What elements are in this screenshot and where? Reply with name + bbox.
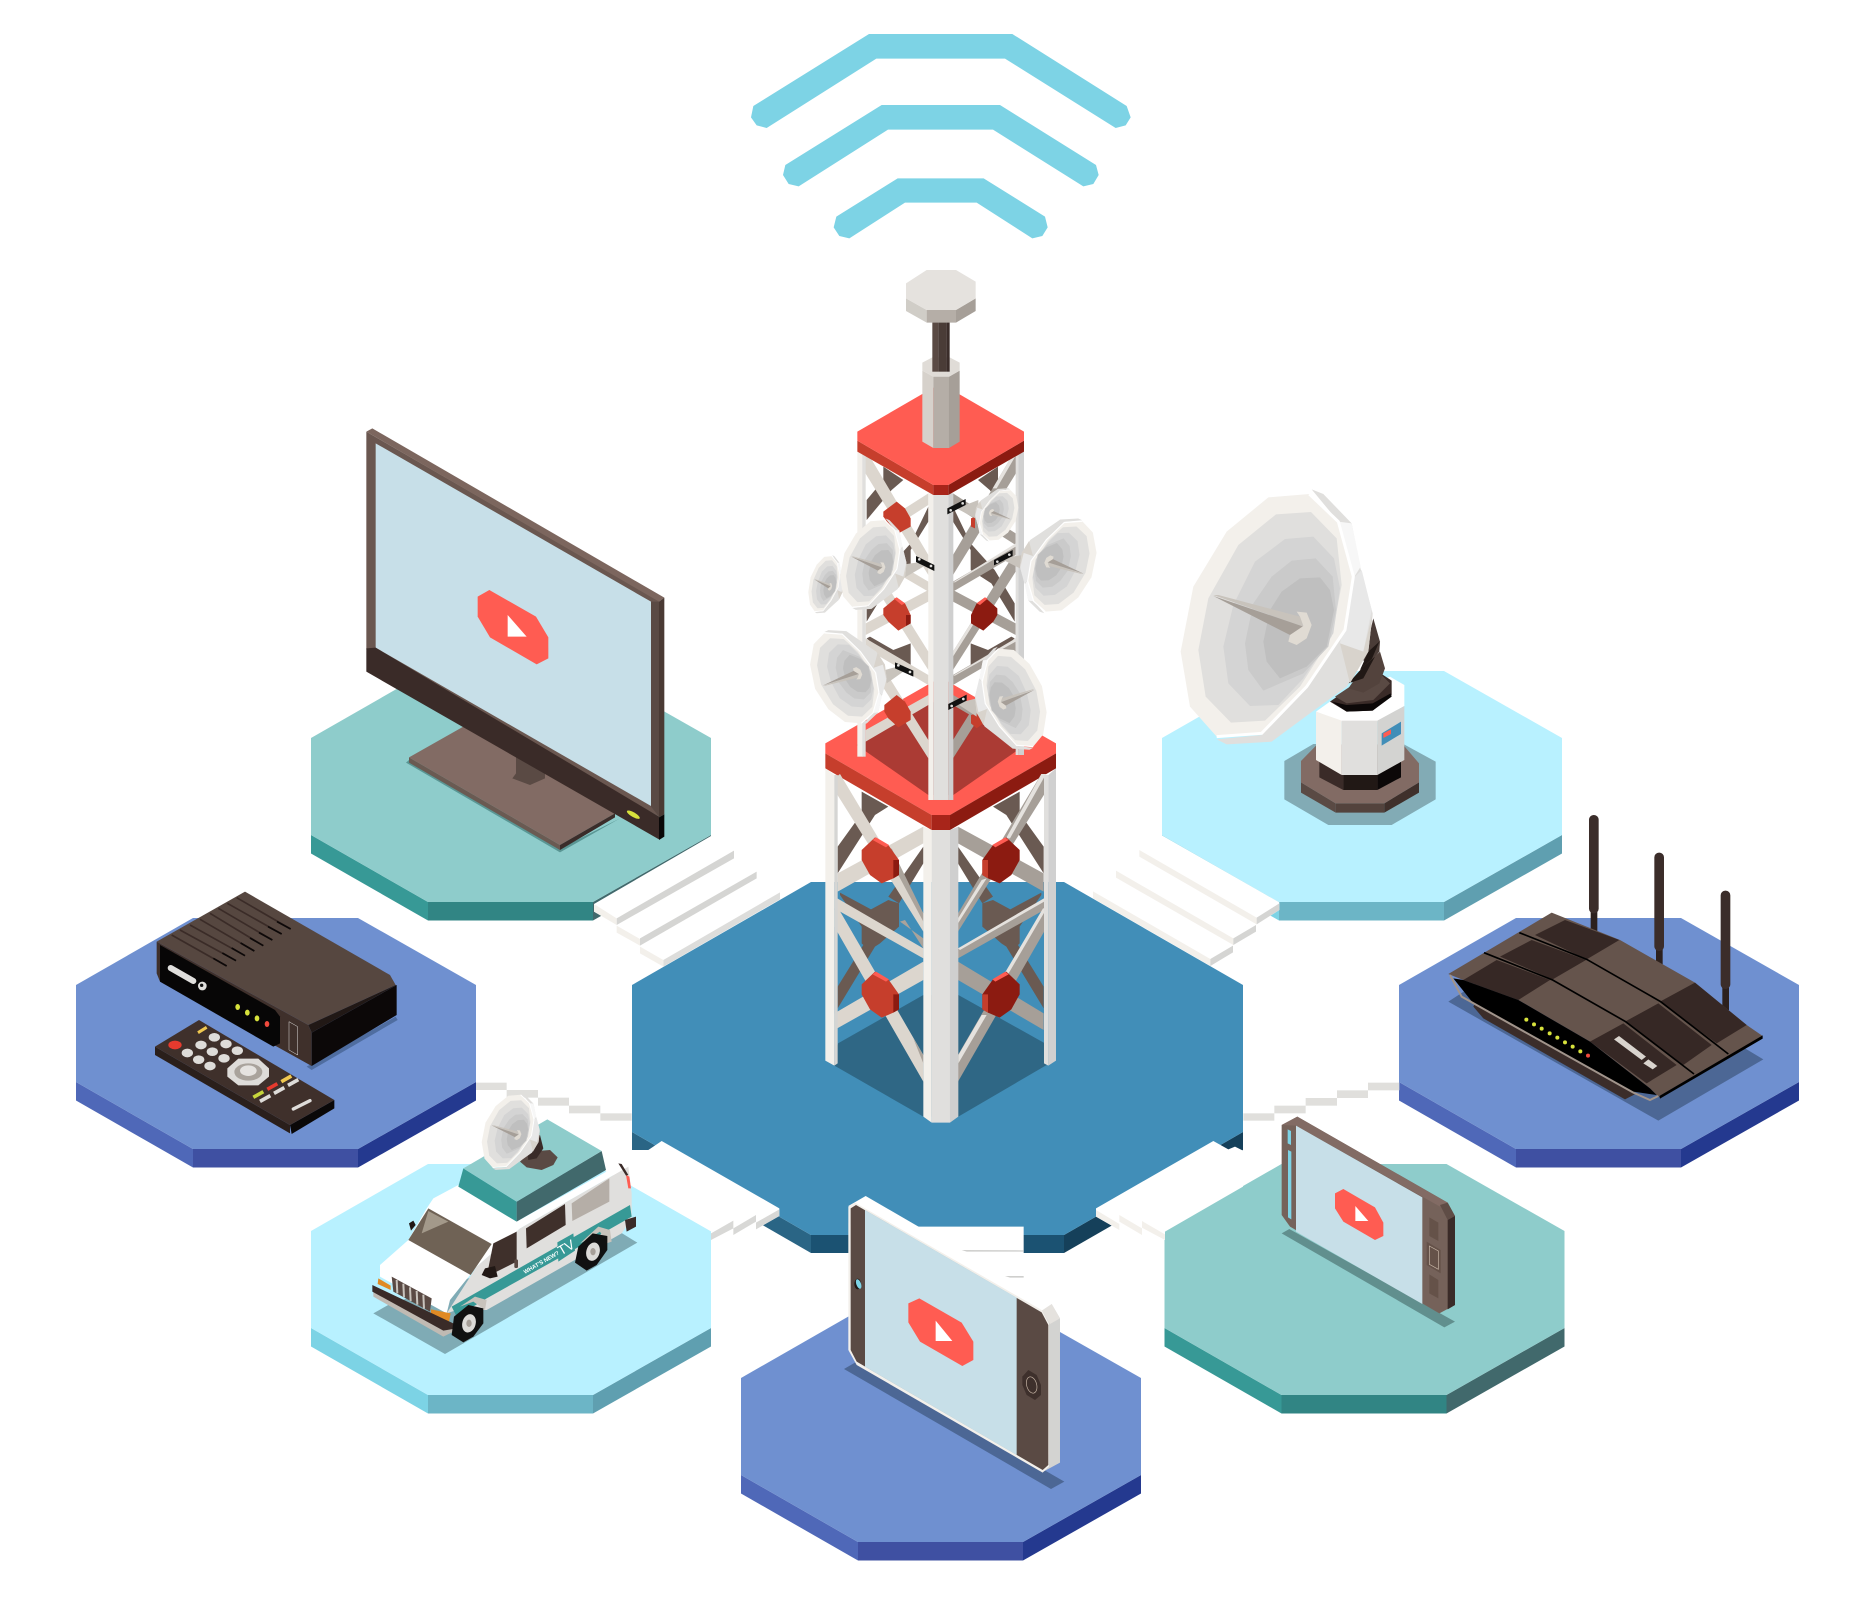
van front wheel <box>452 1305 483 1342</box>
middle tower deck <box>825 677 1056 830</box>
lower centre leg <box>923 827 958 1123</box>
icon: play button <box>478 590 548 664</box>
platform: smartphone <box>1164 1164 1564 1414</box>
lower left leg <box>825 768 838 1066</box>
van roof dish <box>482 1093 540 1170</box>
stairs: tablet to centre <box>917 1227 1024 1283</box>
dish base <box>1284 618 1436 825</box>
device: tablet <box>844 1196 1064 1489</box>
van roof box <box>458 1119 606 1222</box>
stairs: router to centre <box>1243 1083 1399 1121</box>
television screen <box>366 428 664 840</box>
stairs: smartphone to centre <box>1096 1141 1243 1240</box>
tablet case <box>848 1196 1060 1473</box>
transmission tower <box>808 270 1097 1123</box>
tower dish: upper right large <box>1020 518 1097 613</box>
van body <box>372 1163 636 1337</box>
tablet screen <box>865 1210 1017 1455</box>
van lettering: WHAT'S NEW? <box>523 1250 561 1276</box>
lower back bracing <box>838 792 1044 1008</box>
platform: tablet <box>741 1311 1141 1560</box>
van roof dish mount <box>520 1135 558 1170</box>
router status lights <box>1524 1018 1590 1058</box>
tower upper section <box>857 270 1024 800</box>
platform: news van <box>311 1164 711 1414</box>
device: set-top box and remote <box>155 892 398 1134</box>
device: satellite dish <box>1181 489 1436 825</box>
stairs: set-top box to centre <box>476 1083 632 1121</box>
television stand <box>406 727 620 852</box>
upper left bracing <box>863 454 928 758</box>
platform: set-top box <box>76 918 476 1168</box>
smartphone screen <box>1296 1126 1422 1304</box>
dish mounting brackets <box>885 499 1023 717</box>
stairs: television to centre <box>594 836 780 967</box>
icon: play button <box>908 1298 973 1366</box>
device: television <box>366 428 664 852</box>
platform: television <box>311 671 711 920</box>
upper joint plates <box>883 502 997 728</box>
wifi signal waves <box>751 34 1131 238</box>
smartphone case <box>1282 1117 1455 1313</box>
tower dish: upper right small <box>975 488 1018 541</box>
device: news van <box>372 1119 637 1354</box>
upper right bracing <box>953 454 1018 758</box>
upper back bracing <box>867 467 1015 670</box>
lower right leg <box>1044 768 1056 1066</box>
upper legs <box>857 452 1024 800</box>
van lettering <box>523 1237 577 1276</box>
tower dish: lower left <box>810 630 887 725</box>
tower dish: upper left large <box>840 518 907 610</box>
router body <box>1448 913 1763 1100</box>
tower dish: lower right <box>975 647 1047 750</box>
tower dish: upper left small <box>808 555 843 613</box>
top tower deck <box>857 383 1024 495</box>
lower right bracing <box>958 774 1047 1082</box>
lower joint plates <box>862 837 1020 1018</box>
central platform <box>632 882 1243 1253</box>
set-top box <box>157 892 398 1070</box>
platform: satellite dish <box>1162 671 1562 920</box>
tower lower section <box>825 677 1056 1123</box>
stairs: news van to centre <box>632 1141 779 1240</box>
device: router <box>1448 815 1763 1121</box>
device: smartphone <box>1282 1117 1455 1327</box>
dish reflector <box>1181 489 1373 744</box>
router antennas <box>1589 815 1730 1010</box>
van lettering: TV <box>555 1237 577 1258</box>
remote control <box>155 1020 334 1134</box>
stairs: satellite dish to centre <box>1093 836 1279 966</box>
van rear wheel <box>575 1233 607 1271</box>
icon: play button <box>1335 1189 1383 1240</box>
lower left bracing <box>834 774 923 1082</box>
platform: router <box>1399 918 1799 1168</box>
tablet camera and home button <box>854 1279 1041 1400</box>
antenna cap <box>906 270 976 323</box>
antenna mast <box>922 322 960 448</box>
